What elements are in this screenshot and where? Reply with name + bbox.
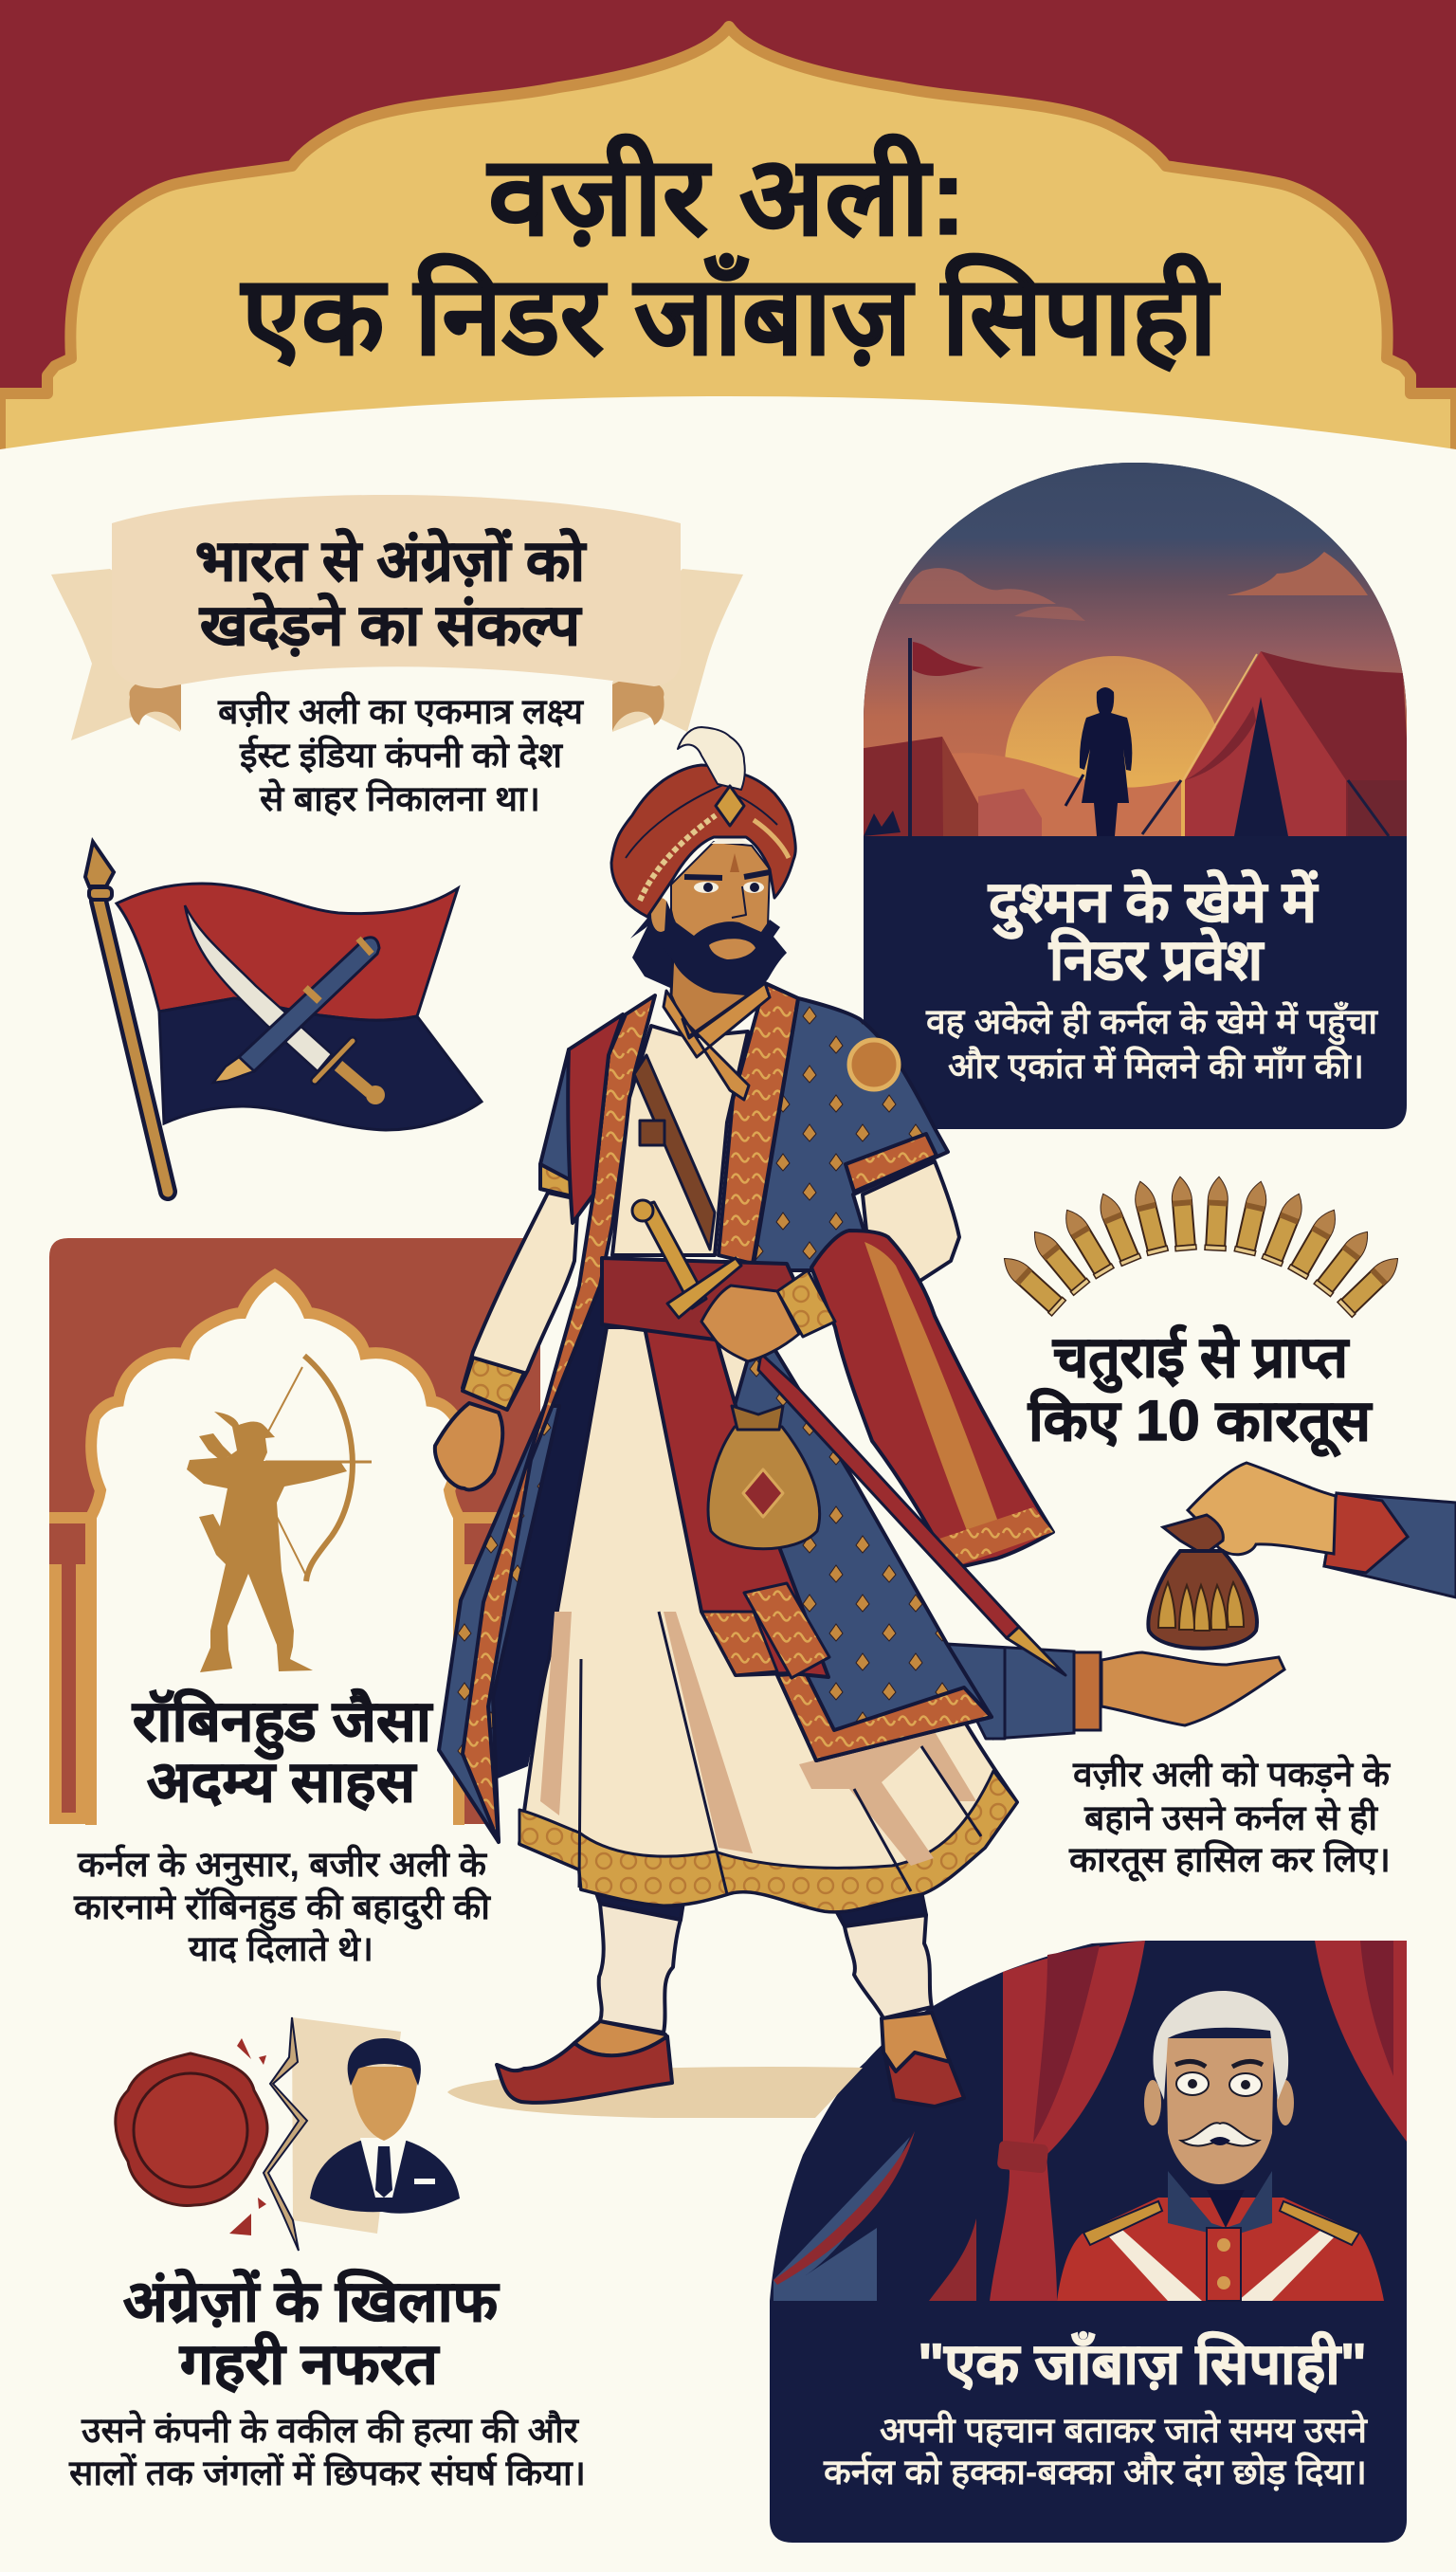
text: उसने कंपनी के वकील की हत्या की और bbox=[81, 2410, 580, 2450]
panel text: वह अकेले ही कर्नल के खेमे में पहुँचा bbox=[925, 1001, 1378, 1046]
flag red band bbox=[117, 884, 458, 1020]
panel text bbox=[925, 1001, 1378, 1085]
panel: Robin Hood like courage bbox=[49, 1238, 540, 1968]
feather bbox=[678, 727, 745, 790]
scroll text bbox=[217, 691, 585, 818]
panel: resolve to drive out the British bbox=[51, 495, 743, 818]
cusped arch opening bbox=[91, 1275, 459, 1839]
coat front band bbox=[719, 983, 798, 1264]
icon: lawyer bust bbox=[310, 2038, 460, 2214]
pleat lines bbox=[579, 1612, 981, 1894]
text: सालों तक जंगलों में छिपकर संघर्ष किया। bbox=[68, 2453, 586, 2492]
hanging sash bbox=[645, 1327, 828, 1677]
crack line bbox=[264, 2017, 307, 2251]
right extended arm bbox=[938, 1644, 1005, 1739]
jewel bbox=[716, 786, 744, 826]
panel: fearless entry into the enemy camp bbox=[858, 460, 1412, 1129]
navy arch panel bbox=[864, 463, 1407, 1129]
flowing dupatta bbox=[811, 1231, 1053, 1569]
icon: torn paper behind the lawyer bbox=[292, 2017, 401, 2234]
scroll text: से बाहर निकालना था। bbox=[259, 778, 540, 818]
sword blade bbox=[185, 905, 332, 1071]
heading: रॉबिनहुड जैसा bbox=[132, 1688, 434, 1760]
ear bbox=[651, 898, 670, 932]
text: कारनामे रॉबिनहुड की बहादुरी की bbox=[73, 1887, 491, 1931]
panel heading bbox=[988, 869, 1319, 992]
kurta skirt bbox=[519, 1327, 1017, 1912]
text: बहाने उसने कर्नल से ही bbox=[1083, 1797, 1378, 1837]
sword hilt bbox=[315, 1041, 353, 1081]
title: वज़ीर अली: bbox=[486, 134, 967, 258]
fountain pen bbox=[239, 938, 379, 1071]
icon: Wazir Ali's receiving arm bbox=[947, 1644, 1284, 1739]
left coat flap bbox=[439, 995, 655, 1842]
right sleeve bbox=[863, 1161, 959, 1286]
panel heading: दुश्मन के खेमे में bbox=[988, 869, 1319, 939]
text: याद दिलाते थे। bbox=[188, 1928, 373, 1968]
eyes and brows bbox=[684, 872, 770, 878]
text: वज़ीर अली को पकड़ने के bbox=[1072, 1754, 1392, 1794]
icon: wax seal bbox=[116, 2038, 267, 2235]
text bbox=[823, 2410, 1368, 2491]
heading: अदम्य साहस bbox=[147, 1750, 417, 1814]
heading: किए 10 कारतूस bbox=[1028, 1388, 1373, 1457]
left sleeve and fist bbox=[435, 1193, 578, 1489]
back of coat bbox=[488, 1261, 612, 1782]
shadow figure, cloak slivers bbox=[774, 2137, 910, 2301]
central figure: Wazir Ali bbox=[435, 727, 1065, 2107]
heading bbox=[123, 2269, 500, 2396]
flag navy band bbox=[159, 998, 482, 1130]
heading: चतुराई से प्राप्त bbox=[1052, 1324, 1350, 1394]
scroll heading: भारत से अंग्रेज़ों को bbox=[195, 528, 587, 593]
colonel bbox=[1057, 1991, 1384, 2301]
chin patch bbox=[709, 939, 755, 959]
shoulder medallion bbox=[849, 1040, 899, 1089]
icon: bag of cartridges bbox=[1148, 1515, 1257, 1649]
scroll text: ईस्ट इंडिया कंपनी को देश bbox=[239, 735, 564, 775]
sleeve trim bbox=[846, 1134, 937, 1192]
sword hilt bbox=[632, 1200, 741, 1318]
terracotta arched backdrop bbox=[49, 1238, 540, 1844]
text: अपनी पहचान बताकर जाते समय उसने bbox=[880, 2410, 1368, 2450]
text: कर्नल को हक्का-बक्का और दंग छोड़ दिया। bbox=[823, 2452, 1367, 2491]
right curtain bbox=[1315, 1941, 1407, 2142]
flagpole bbox=[99, 901, 168, 1192]
golden arch bbox=[0, 27, 1456, 465]
heading bbox=[1028, 1324, 1373, 1457]
heading: गहरी नफरत bbox=[179, 2331, 440, 2396]
head bbox=[611, 727, 795, 1100]
nose and bindi bbox=[732, 886, 746, 918]
navy panel bbox=[770, 1941, 1407, 2543]
scroll heading: खदेड़ने का संकल्प bbox=[199, 593, 582, 657]
hem border bbox=[519, 1771, 1017, 1912]
icon: arc of twelve cartridges bbox=[998, 1177, 1405, 1317]
neck bbox=[671, 953, 765, 1036]
blue coat upper bbox=[753, 998, 948, 1270]
ground shadow bbox=[447, 2067, 863, 2118]
panel text: और एकांत में मिलने की माँग की। bbox=[948, 1046, 1364, 1085]
title: एक निडर जाँबाज़ सिपाही bbox=[240, 253, 1221, 377]
hair and ear bbox=[630, 910, 682, 988]
text bbox=[1068, 1754, 1392, 1882]
sword scabbard bbox=[758, 1354, 1065, 1675]
turban bbox=[611, 765, 795, 917]
sunset scene bbox=[864, 463, 1407, 836]
pleat shading bbox=[540, 1612, 976, 1866]
pouch bbox=[708, 1406, 820, 1549]
panel: a brave soldier, colonel stunned bbox=[770, 1941, 1407, 2543]
panel: ten cartridges obtained cleverly bbox=[947, 1177, 1456, 1882]
scroll heading bbox=[195, 528, 587, 657]
cream body curve bbox=[0, 396, 1456, 493]
scroll ribbon bbox=[51, 495, 743, 740]
face bbox=[671, 842, 770, 976]
waist sash bbox=[602, 1258, 815, 1341]
collar bands bbox=[664, 983, 770, 1100]
legs and shoes bbox=[497, 1882, 964, 2107]
icon: archer silhouette bbox=[187, 1356, 372, 1672]
torso kurta bbox=[612, 1026, 748, 1255]
text bbox=[68, 2410, 586, 2492]
text bbox=[73, 1844, 491, 1968]
heading: "एक जाँबाज़ सिपाही" bbox=[918, 2331, 1367, 2396]
shoulder strap bbox=[634, 1055, 715, 1250]
icon: flag with crossed sword and pen bbox=[85, 842, 482, 1192]
title bbox=[240, 134, 1221, 377]
forehead cloth bbox=[711, 831, 749, 844]
sash end panels bbox=[701, 1583, 829, 1678]
heading bbox=[132, 1688, 434, 1814]
scroll text: बज़ीर अली का एकमात्र लक्ष्य bbox=[217, 691, 585, 731]
left curtain bbox=[990, 1941, 1145, 2301]
text: कर्नल के अनुसार, बजीर अली के bbox=[77, 1844, 488, 1887]
right hand gripping hilt bbox=[701, 1270, 835, 1361]
left shoulder sleeve and stole bbox=[540, 1014, 623, 1223]
text: कारतूस हासिल कर लिए। bbox=[1068, 1839, 1391, 1882]
icon: colonel's hand with sleeve bbox=[1188, 1463, 1456, 1597]
coat hem border bbox=[777, 1673, 992, 1760]
panel heading: निडर प्रवेश bbox=[1048, 927, 1265, 992]
blue coat lower bbox=[730, 1322, 992, 1760]
beard bbox=[664, 901, 787, 995]
header banner bbox=[0, 0, 1456, 493]
maroon header background bbox=[0, 0, 1456, 455]
heading: अंग्रेज़ों के खिलाफ bbox=[123, 2269, 500, 2333]
panel: deep hatred for the British bbox=[68, 2017, 586, 2492]
silhouette of the soldier bbox=[1080, 687, 1132, 836]
